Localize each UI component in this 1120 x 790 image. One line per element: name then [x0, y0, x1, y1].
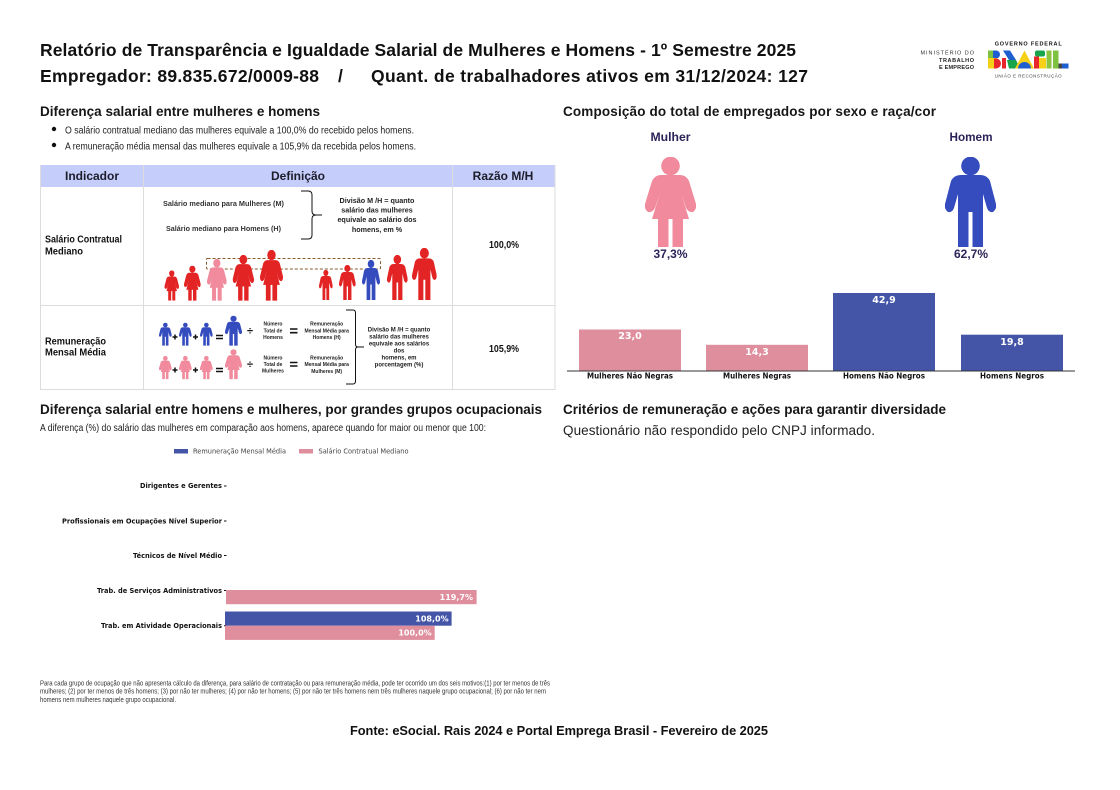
fórmula: remuneração homens: Homens: [263, 335, 283, 341]
heading: composição: Composição do total de empregados por sexo e raça/cor: [563, 104, 937, 119]
title: Empregador: 89.835.672/0009-88: [40, 66, 319, 86]
chave e definição da razão: [346, 310, 431, 384]
fórmula: remuneração homens: Mensal Média para: [304, 328, 349, 334]
linha: remuneração mensal média: Remuneração: [45, 336, 106, 348]
chave e definição da razão: homens, em: [381, 356, 417, 362]
logo: ministério e governo federal: E EMPREGO: [939, 65, 975, 71]
rótulo: técnicos: Técnicos de Nível Médio: [133, 552, 222, 560]
legenda: Salário Contratual Mediano: [318, 448, 408, 456]
texto: questionário: Questionário não respondido pelo CNPJ informado.: [563, 423, 875, 438]
logo: ministério e governo federal: TRABALHO: [939, 58, 975, 64]
chave e definição da razão: salário das mulheres: [369, 334, 430, 340]
title: /: [338, 66, 343, 86]
valor: 105,9%: 105,9%: [489, 344, 519, 355]
bullet list: [52, 126, 416, 152]
barra: mulheres não negras: Mulheres Não Negras: [587, 372, 674, 380]
fórmula: salário mediano: salário das mulheres: [341, 206, 413, 214]
barra: mulheres negras: [706, 345, 808, 380]
rótulo: serviços administrativos: Trab. de Serviços Administrativos: [97, 587, 222, 595]
fórmula: remuneração homens: ÷: [247, 326, 253, 338]
legenda: [174, 448, 408, 456]
nota de rodapé: [40, 680, 550, 704]
barra: homens não negros: [833, 293, 935, 380]
linha: remuneração mensal média: Mensal Média: [45, 348, 106, 359]
linha: salário contratual mediano: Mediano: [45, 246, 83, 258]
barra: serviços administrativos salário: [226, 590, 477, 604]
fórmula: remuneração homens: [159, 316, 349, 346]
rótulo: dirigentes: Dirigentes e Gerentes: [140, 482, 222, 490]
panel: tabela de indicadores: [40, 165, 555, 390]
subtítulo: grupos ocupacionais: A diferença (%) do salário das mulheres em comparação aos homens, aparece quando for maior ou menor que 100:: [40, 423, 486, 434]
chave e definição da razão: Divisão M /H = quanto: [368, 328, 431, 334]
cabeçalho: razão: Razão M/H: [473, 169, 533, 183]
fonte: Fonte: eSocial. Rais 2024 e Portal Emprega Brasil - Fevereiro de 2025: [350, 723, 768, 738]
fórmula: salário mediano: Salário mediano para Mulheres (M): [163, 199, 284, 208]
ícone: mulher 37,3%: [645, 130, 696, 261]
pictograma: mulheres e homens em ordem de salário: [164, 248, 437, 301]
bullet list: A remuneração média mensal das mulheres equivale a 105,9% da recebida pelos homens.: [65, 142, 416, 152]
logo: ministério e governo federal: [920, 42, 1068, 79]
fórmula: salário mediano: equivale ao salário dos: [337, 215, 417, 224]
rótulo: atividade operacionais: Trab. em Atividade Operacionais: [101, 622, 222, 630]
title: Relatório de Transparência e Igualdade Salarial de Mulheres e Homens - 1º Semestre 2025: [40, 40, 796, 60]
fórmula: remuneração mulheres: Mulheres: [262, 368, 284, 374]
gráfico de barras: sexo e raça/cor: [567, 293, 1075, 380]
gráfico de barras horizontais: grupos ocupacionais: [62, 482, 477, 640]
barra: homens não negros: 42,9: [872, 295, 896, 306]
barra: homens negros: Homens Negros: [980, 372, 1045, 380]
title: [40, 40, 808, 86]
ícone: mulher 37,3%: 37,3%: [654, 247, 688, 261]
valor: 100,0%: 100,0%: [489, 240, 519, 251]
bullet list: O salário contratual mediano das mulheres equivale a 100,0% do recebido pelos homens.: [65, 126, 414, 136]
nota de rodapé: Para cada grupo de ocupação que não apresenta cálculo da diferença, para salário de contratação ou para remuneração média, pode ter ocorrido um dos seis motivos:(1) por ter menos de três: [40, 680, 550, 688]
logo: ministério e governo federal: MINISTÉRIO DO: [920, 50, 975, 57]
fórmula: remuneração mulheres: Total de: [264, 362, 283, 368]
barra: mulheres negras: Mulheres Negras: [723, 372, 792, 380]
barra: mulheres não negras: [579, 330, 681, 380]
logo: ministério e governo federal: UNIÃO E RECONSTRUÇÃO: [995, 73, 1062, 79]
ícone: homem 62,7%: 62,7%: [954, 247, 988, 261]
fórmula: remuneração mulheres: Mensal Média para: [304, 362, 349, 368]
fórmula: remuneração mulheres: ÷: [247, 359, 253, 371]
legenda: Remuneração Mensal Média: [193, 448, 286, 456]
barra: homens negros: 19,8: [1000, 337, 1024, 348]
fórmula: remuneração homens: Homens (H): [313, 335, 341, 341]
barra: operacionais remuneração: [225, 612, 452, 626]
barra: mulheres não negras: 23,0: [618, 331, 642, 342]
fórmula: remuneração homens: Total de: [264, 328, 283, 334]
fórmula: salário mediano: [163, 191, 417, 239]
nota de rodapé: homens nem mulheres naquele grupo ocupacional.: [40, 697, 176, 704]
barra: serviços administrativos salário: 119,7%: [440, 593, 473, 602]
fórmula: remuneração mulheres: [159, 349, 349, 379]
nota de rodapé: mulheres; (2) por ter menos de três homens; (3) por não ter mulheres; (4) por não ter homens; (5) por não ter três homens nem três mulheres naquele grupo ocupacional; (6) por não ter nem: [40, 689, 546, 696]
chave e definição da razão: porcentagem (%): [375, 362, 423, 368]
barra: mulheres negras: 14,3: [745, 347, 769, 358]
barra: homens negros: [961, 335, 1063, 380]
fórmula: salário mediano: Divisão M /H = quanto: [340, 196, 415, 205]
fórmula: remuneração mulheres: Remuneração: [310, 356, 343, 362]
heading: critérios: Critérios de remuneração e ações para garantir diversidade: [563, 402, 946, 417]
fórmula: remuneração homens: Número: [264, 322, 282, 328]
barra: operacionais salário: 100,0%: [398, 628, 432, 638]
barra: operacionais salário: [225, 626, 435, 640]
barra: operacionais remuneração: 108,0%: [415, 614, 449, 624]
fórmula: salário mediano: Salário mediano para Homens (H): [166, 224, 281, 233]
chave e definição da razão: equivale aos salários: [369, 342, 430, 348]
ícone: homem 62,7%: [945, 130, 996, 261]
ícone: mulher 37,3%: Mulher: [650, 130, 691, 144]
fórmula: salário mediano: homens, em %: [352, 225, 403, 234]
fórmula: remuneração mulheres: Número: [264, 356, 282, 362]
heading: diferença salarial: Diferença salarial entre mulheres e homens: [40, 104, 320, 119]
linha: salário contratual mediano: Salário Contratual: [45, 234, 122, 246]
fórmula: remuneração mulheres: Mulheres (M): [311, 369, 342, 375]
cabeçalho: definição: Definição: [271, 169, 325, 183]
rótulo: profissionais: Profissionais em Ocupações Nível Superior: [62, 518, 223, 526]
title: Quant. de trabalhadores ativos em 31/12/2024: 127: [371, 66, 808, 86]
fórmula: remuneração homens: Remuneração: [310, 322, 343, 328]
heading: grupos ocupacionais: Diferença salarial entre homens e mulheres, por grandes grupos ocupacionais: [40, 402, 542, 417]
linha: remuneração mensal média: [45, 336, 106, 359]
chave e definição da razão: dos: [394, 348, 405, 354]
barra: homens não negros: Homens Não Negros: [843, 372, 926, 380]
logo: ministério e governo federal: GOVERNO FEDERAL: [995, 42, 1062, 48]
ícone: homem 62,7%: Homem: [950, 130, 992, 144]
cabeçalho: indicador: Indicador: [65, 169, 119, 183]
linha: salário contratual mediano: [45, 234, 122, 258]
